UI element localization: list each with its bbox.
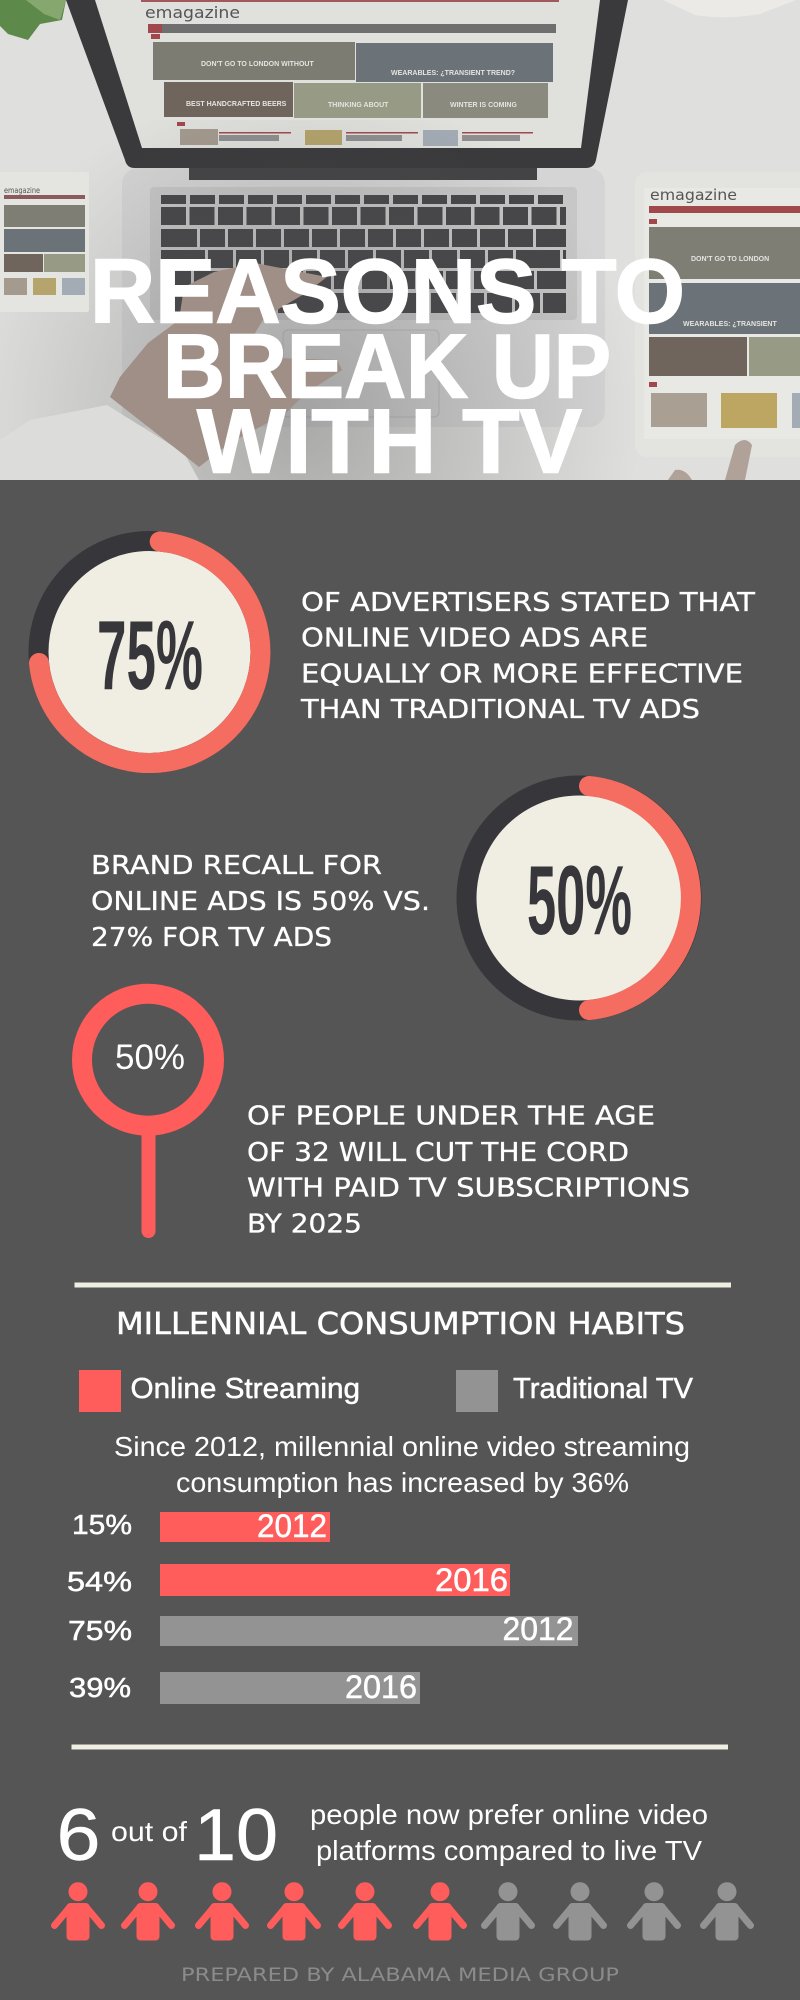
article tiles [153,42,553,118]
bar: online 2016 [67,1562,510,1598]
bar: online 2016: 2016 [435,1562,508,1598]
article tiles: WINTER IS COMING [450,102,517,109]
text: brand recall stat [91,851,430,953]
icon: 50% pin: 50% [115,1038,185,1077]
text: cord cutting stat: BY 2025 [247,1210,362,1240]
person 4 [270,1882,318,1940]
text: cord cutting stat: WITH PAID TV SUBSCRIPTIONS [247,1174,690,1204]
tablet: DON'T GO TO LONDON [691,256,769,263]
stat: 6 out of 10: out of [111,1816,187,1847]
tablet: emagazine [650,186,737,204]
bar: online 2012: 15% [72,1509,132,1540]
text: people prefer online video [310,1799,708,1866]
person 10 [704,1882,750,1940]
bar: tv 2016: 2016 [345,1669,417,1705]
text: cord cutting stat: OF PEOPLE UNDER THE AGE [247,1102,655,1132]
shading over lower desk [0,120,640,480]
title: BREAK UP [163,316,611,418]
sleeve [0,405,199,480]
text: brand recall stat: ONLINE ADS IS 50% VS. [91,887,430,917]
laptop screen [95,0,600,148]
stat: 50% ring: 50% [527,845,632,955]
tablet: WEARABLES: ¿TRANSIENT [683,321,777,328]
bar chart [67,1508,578,1705]
article tiles: BEST HANDCRAFTED BEERS [186,101,287,108]
text: streaming increase: consumption has increased by 36% [176,1467,629,1498]
bowl top right [663,0,796,17]
person 3 [198,1882,246,1940]
stat: 75% ring [38,541,260,763]
phone [0,172,89,312]
text: advertisers stat: ONLINE VIDEO ADS ARE [301,624,648,654]
stat: 6 out of 10: 10 [194,1795,278,1876]
person 2 [124,1882,172,1940]
icon: plant leaves [0,0,66,40]
stat: 6 out of 10: 6 [56,1795,100,1876]
bar: tv 2012: 2012 [502,1611,574,1647]
hand [110,263,342,467]
person 6 [416,1882,464,1940]
bar: tv 2012: 75% [68,1615,132,1646]
bar: tv 2012 [68,1611,578,1647]
hero photo: laptop, phone and tablet on a desk [0,0,800,492]
phone: emagazine [4,186,40,195]
laptop hinge [189,168,537,180]
icon row: ten people, six red and four gray [54,1882,750,1940]
bar: online 2012 [72,1508,330,1544]
laptop screen bezel [66,0,628,168]
person 5 [342,1882,388,1940]
icon: 50% pin [82,994,214,1238]
article tiles: DON'T GO TO LONDON WITHOUT [201,61,314,68]
person 7 [484,1882,532,1940]
keyboard [150,187,577,320]
person 1 [54,1882,102,1940]
text: brand recall stat: BRAND RECALL FOR [91,851,382,881]
bar: online 2016: 54% [67,1566,132,1597]
tablet [635,172,800,457]
text: streaming increase: Since 2012, millennial online video streaming [114,1431,690,1462]
text: people prefer online video: people now prefer online video [310,1799,708,1830]
article tiles: THINKING ABOUT [328,102,389,109]
stat: 6 out of 10 [56,1795,278,1876]
footer credit: PREPARED BY ALABAMA MEDIA GROUP [181,1964,619,1986]
bar: online 2012: 2012 [257,1508,327,1544]
text: cord cutting stat [247,1102,690,1240]
fingers on tablet [668,440,752,480]
bar: tv 2016: 39% [69,1672,131,1703]
text: advertisers stat: THAN TRADITIONAL TV ADS [300,695,700,725]
article tiles: WEARABLES: ¿TRANSIENT TREND? [391,70,515,77]
text: people prefer online video: platforms compared to live TV [316,1835,702,1866]
text: advertisers stat [300,588,755,725]
legend: Online Streaming [130,1373,360,1405]
legend [79,1370,694,1412]
text: advertisers stat: EQUALLY OR MORE EFFECTIVE [301,660,743,690]
text: streaming increase [114,1431,690,1498]
text: cord cutting stat: OF 32 WILL CUT THE CORD [247,1138,629,1168]
person 9 [630,1882,678,1940]
legend: Traditional TV [513,1373,694,1405]
nav bar [148,24,556,33]
bar: tv 2016 [69,1669,420,1705]
text: brand recall stat: 27% FOR TV ADS [91,923,332,953]
trackpad [283,330,439,417]
emagazine logo: emagazine [145,3,240,22]
laptop base [122,168,605,427]
person 8 [556,1882,604,1940]
heading: millennial consumption habits: MILLENNIAL CONSUMPTION HABITS [116,1307,685,1342]
other articles [180,129,533,146]
title: REASONS TO [90,242,685,342]
stat: 50% ring [466,786,692,1010]
stat: 75% ring: 75% [97,600,203,710]
text: advertisers stat: OF ADVERTISERS STATED THAT [301,588,755,618]
title [90,242,685,492]
title: WITH TV [197,392,582,492]
